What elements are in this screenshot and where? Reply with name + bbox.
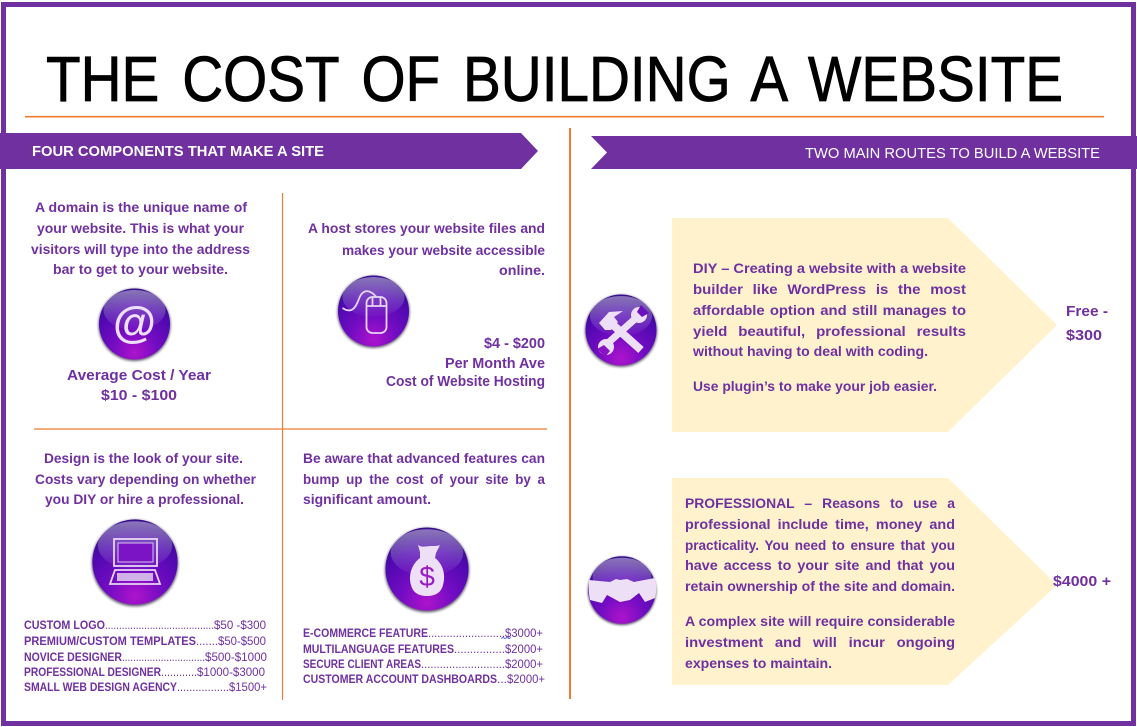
- price list: features: $2000+: [505, 644, 543, 656]
- price list: features: ...: [497, 674, 507, 686]
- price list: design: .......................................: [105, 620, 214, 632]
- price list: design: [24, 620, 267, 694]
- panel: DIY route: [585, 218, 1108, 432]
- DIY arrow box: [672, 218, 1057, 432]
- price list: features: E-COMMERCE FEATURE: [303, 628, 428, 640]
- hosting cost: [386, 336, 545, 390]
- banner: two main routes: TWO MAIN ROUTES TO BUILD A WEBSITE: [805, 146, 1100, 162]
- DIY text: Use plugin’s to make your job easier.: [693, 379, 937, 394]
- price list: features: CUSTOMER ACCOUNT DASHBOARDS: [303, 674, 497, 686]
- banner: two main routes: [591, 136, 1137, 169]
- price list: design: $50-$500: [218, 636, 266, 648]
- hosting cost: Per Month Ave: [445, 356, 545, 372]
- price list: design: $1000-$3000: [197, 667, 265, 679]
- domain description: [31, 200, 250, 277]
- panel: domain: [31, 200, 250, 404]
- DIY text: yield beautiful, professional results: [693, 324, 966, 339]
- price list: features: $2000+: [505, 659, 543, 671]
- price list: design: PREMIUM/CUSTOM TEMPLATES: [24, 636, 196, 648]
- professional text: [685, 496, 956, 671]
- price list: design: ............: [161, 667, 197, 679]
- price list: features: ...........................: [421, 659, 505, 671]
- professional text: expenses to maintain.: [685, 656, 832, 671]
- banner: four components: [0, 133, 538, 169]
- professional text: investment and will incur ongoing: [685, 635, 955, 650]
- price list: features: MULTILANGUAGE FEATURES: [303, 644, 454, 656]
- domain cost: [67, 368, 211, 404]
- design description: Costs vary depending on whether: [35, 472, 257, 487]
- domain cost: Average Cost / Year: [67, 368, 211, 384]
- professional text: practicality. You need to ensure that you: [685, 538, 955, 553]
- DIY text: builder like WordPress is the most: [693, 282, 967, 297]
- domain description: bar to get to your website.: [53, 262, 228, 277]
- hosting cost: $4 - $200: [484, 336, 545, 352]
- design description: Design is the look of your site.: [44, 451, 243, 466]
- hammer: [599, 311, 641, 350]
- hosting description: A host stores your website files and: [308, 221, 545, 236]
- professional text: professional include time, money and: [685, 517, 955, 532]
- DIY price: Free -: [1066, 304, 1108, 320]
- icon: money bag: $: [419, 561, 435, 592]
- hosting description: [308, 221, 545, 278]
- hosting description: online.: [499, 263, 545, 278]
- price list: features: SECURE CLIENT AREAS: [303, 659, 421, 671]
- professional text: have access to your site and that you: [685, 558, 955, 573]
- panel: design: [24, 451, 267, 694]
- domain description: visitors will type into the address: [31, 242, 250, 257]
- design description: you DIY or hire a professional.: [45, 492, 244, 507]
- features description: [303, 451, 545, 507]
- price list: features: $3000+: [505, 628, 543, 640]
- price list: design: $1500+: [229, 682, 267, 694]
- price list: design: .................: [177, 682, 229, 694]
- title underline: [25, 116, 1104, 118]
- price list: design: SMALL WEB DESIGN AGENCY: [24, 682, 177, 694]
- professional text: A complex site will require considerable: [685, 614, 956, 629]
- icon: at sign: @: [113, 298, 156, 347]
- price list: features: $2000+: [507, 674, 545, 686]
- DIY text: [692, 261, 967, 394]
- panel: advanced features: [303, 451, 545, 686]
- domain description: your website. This is what your: [37, 221, 245, 236]
- features description: bump up the cost of your site by a: [303, 472, 545, 487]
- price list: design: CUSTOM LOGO: [24, 620, 105, 632]
- wrench: [597, 305, 649, 357]
- price list: design: PROFESSIONAL DESIGNER: [24, 667, 162, 679]
- DIY text: DIY – Creating a website with a website: [693, 261, 967, 276]
- price list: features: .........................: [428, 628, 505, 640]
- professional text: PROFESSIONAL – Reasons to use a: [685, 496, 955, 511]
- hosting description: makes your website accessible: [342, 243, 545, 258]
- professional arrow box: [672, 478, 1057, 685]
- price list: design: NOVICE DESIGNER: [24, 652, 123, 664]
- price list: design: $50 -$300: [214, 620, 266, 632]
- price list: features: [303, 628, 545, 686]
- panel: professional route: [588, 478, 1111, 685]
- icon: at sign: [98, 288, 170, 361]
- domain cost: $10 - $100: [101, 388, 177, 404]
- DIY text: without having to deal with coding.: [692, 344, 928, 359]
- icon: mouse: [338, 276, 410, 348]
- price list: design: .......: [196, 636, 218, 648]
- design description: [35, 451, 257, 507]
- professional price: $4000 +: [1053, 574, 1111, 590]
- panel: hosting: [308, 221, 545, 390]
- DIY price: [1066, 304, 1108, 344]
- DIY text: affordable option and still manages to: [693, 303, 966, 318]
- price list: design: $500-$1000: [205, 652, 267, 664]
- professional text: retain ownership of the site and domain.: [685, 579, 955, 594]
- features description: Be aware that advanced features can: [303, 451, 545, 466]
- price list: design: ..............................: [122, 652, 205, 664]
- domain description: A domain is the unique name of: [35, 200, 248, 215]
- banner: four components: FOUR COMPONENTS THAT MAKE A SITE: [32, 144, 324, 160]
- DIY price: $300: [1066, 328, 1102, 344]
- icon: laptop: [92, 519, 178, 606]
- price list: features: ................: [454, 644, 505, 656]
- hosting cost: Cost of Website Hosting: [386, 374, 545, 390]
- icon: tools: [585, 294, 657, 367]
- features description: significant amount.: [303, 492, 431, 507]
- icon: handshake: [588, 556, 656, 625]
- icon: money bag: [385, 527, 469, 612]
